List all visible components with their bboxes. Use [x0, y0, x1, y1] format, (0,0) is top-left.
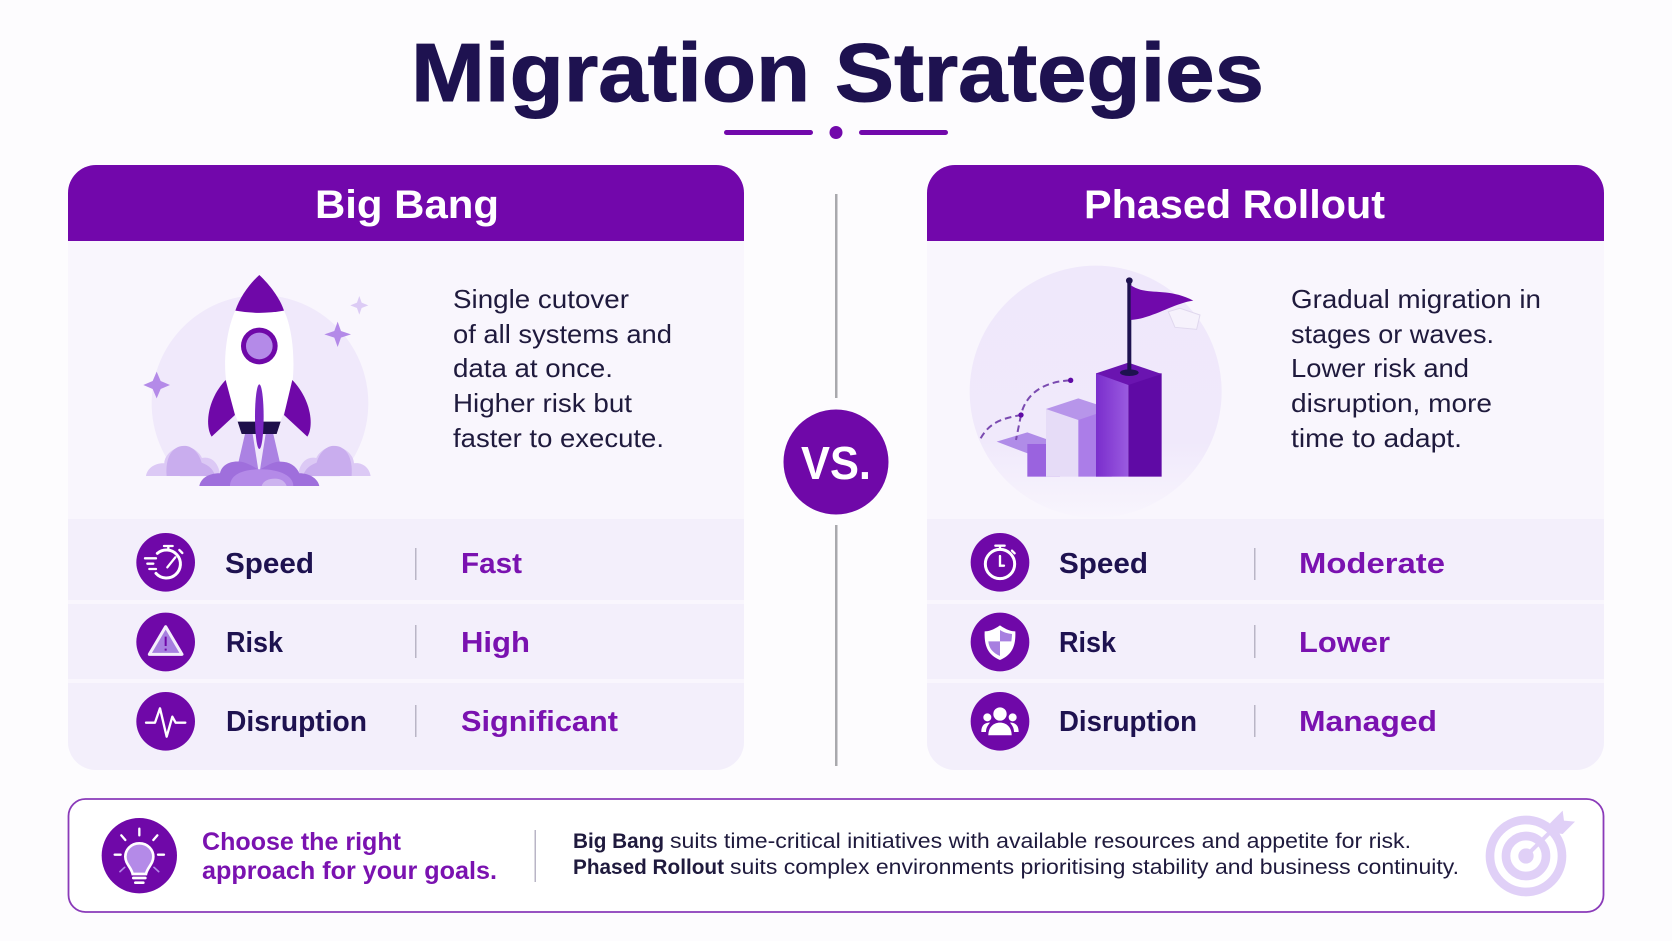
illustration: flag on rising steps — [970, 266, 1222, 518]
description: Phased Rollout — [1291, 284, 1541, 453]
VS badge — [784, 410, 888, 514]
description: Big Bang: data at once. — [453, 353, 613, 383]
icon: fast stopwatch — [136, 533, 195, 592]
description: Phased Rollout: time to adapt. — [1291, 423, 1462, 453]
center divider line — [835, 194, 838, 766]
panel heading: Phased Rollout: Phased Rollout — [1084, 183, 1385, 227]
callout: choose the right approach — [68, 799, 1604, 912]
callout text: suits time-critical initiatives with available resources and appetite for risk. — [670, 829, 1411, 853]
label: Disruption — [226, 706, 367, 738]
icon: stopwatch — [971, 533, 1029, 592]
VS badge: VS. — [801, 437, 871, 489]
callout text: suits complex environments prioritising stability and business continuity. — [730, 855, 1459, 879]
description: Big Bang: Single cutover — [453, 284, 629, 314]
row: Disruption — [927, 683, 1604, 770]
panel background — [68, 165, 744, 770]
panel heading: Big Bang — [68, 165, 744, 241]
callout text: Big Bang — [573, 829, 664, 853]
icon: pulse — [136, 692, 195, 751]
value: Managed — [1299, 706, 1437, 738]
description: Big Bang: faster to execute. — [453, 423, 664, 453]
icon: shield — [971, 613, 1029, 671]
row: Risk — [927, 604, 1604, 679]
description: Phased Rollout: Gradual migration in — [1291, 284, 1541, 314]
row: Speed — [927, 519, 1604, 600]
title divider — [724, 126, 948, 139]
callout text — [573, 829, 1459, 879]
panel: Big Bang — [68, 165, 744, 770]
icon: warning triangle — [136, 613, 195, 671]
value: Lower — [1299, 627, 1390, 659]
illustration: rocket — [127, 275, 393, 517]
label: Disruption — [1059, 706, 1197, 738]
label: Speed — [1059, 548, 1148, 580]
icon: lightbulb — [102, 818, 177, 893]
callout heading: approach for your goals. — [202, 857, 497, 885]
panel heading: Phased Rollout — [927, 165, 1604, 241]
callout heading — [202, 828, 497, 885]
value: Fast — [461, 548, 522, 580]
panel: Phased Rollout — [927, 165, 1604, 770]
label: Risk — [1059, 627, 1117, 659]
row: Disruption — [68, 683, 744, 770]
row: Speed — [68, 519, 744, 600]
icon: target — [1490, 811, 1575, 892]
description: Big Bang — [453, 284, 672, 453]
callout text: Phased Rollout — [573, 855, 724, 879]
value: High — [461, 627, 530, 659]
label: Speed — [225, 548, 314, 580]
panel heading: Big Bang: Big Bang — [315, 183, 499, 227]
value: Moderate — [1299, 548, 1445, 580]
panel background — [927, 165, 1604, 770]
callout heading: Choose the right — [202, 828, 402, 856]
description: Phased Rollout: Lower risk and — [1291, 353, 1469, 383]
description: Phased Rollout: disruption, more — [1291, 388, 1492, 418]
description: Big Bang: Higher risk but — [453, 388, 633, 418]
title: Migration Strategies — [411, 26, 1264, 119]
label: Risk — [226, 627, 284, 659]
row: Risk — [68, 604, 744, 679]
icon: people — [971, 692, 1029, 751]
value: Significant — [461, 706, 618, 738]
description: Phased Rollout: stages or waves. — [1291, 319, 1494, 349]
description: Big Bang: of all systems and — [453, 319, 672, 349]
